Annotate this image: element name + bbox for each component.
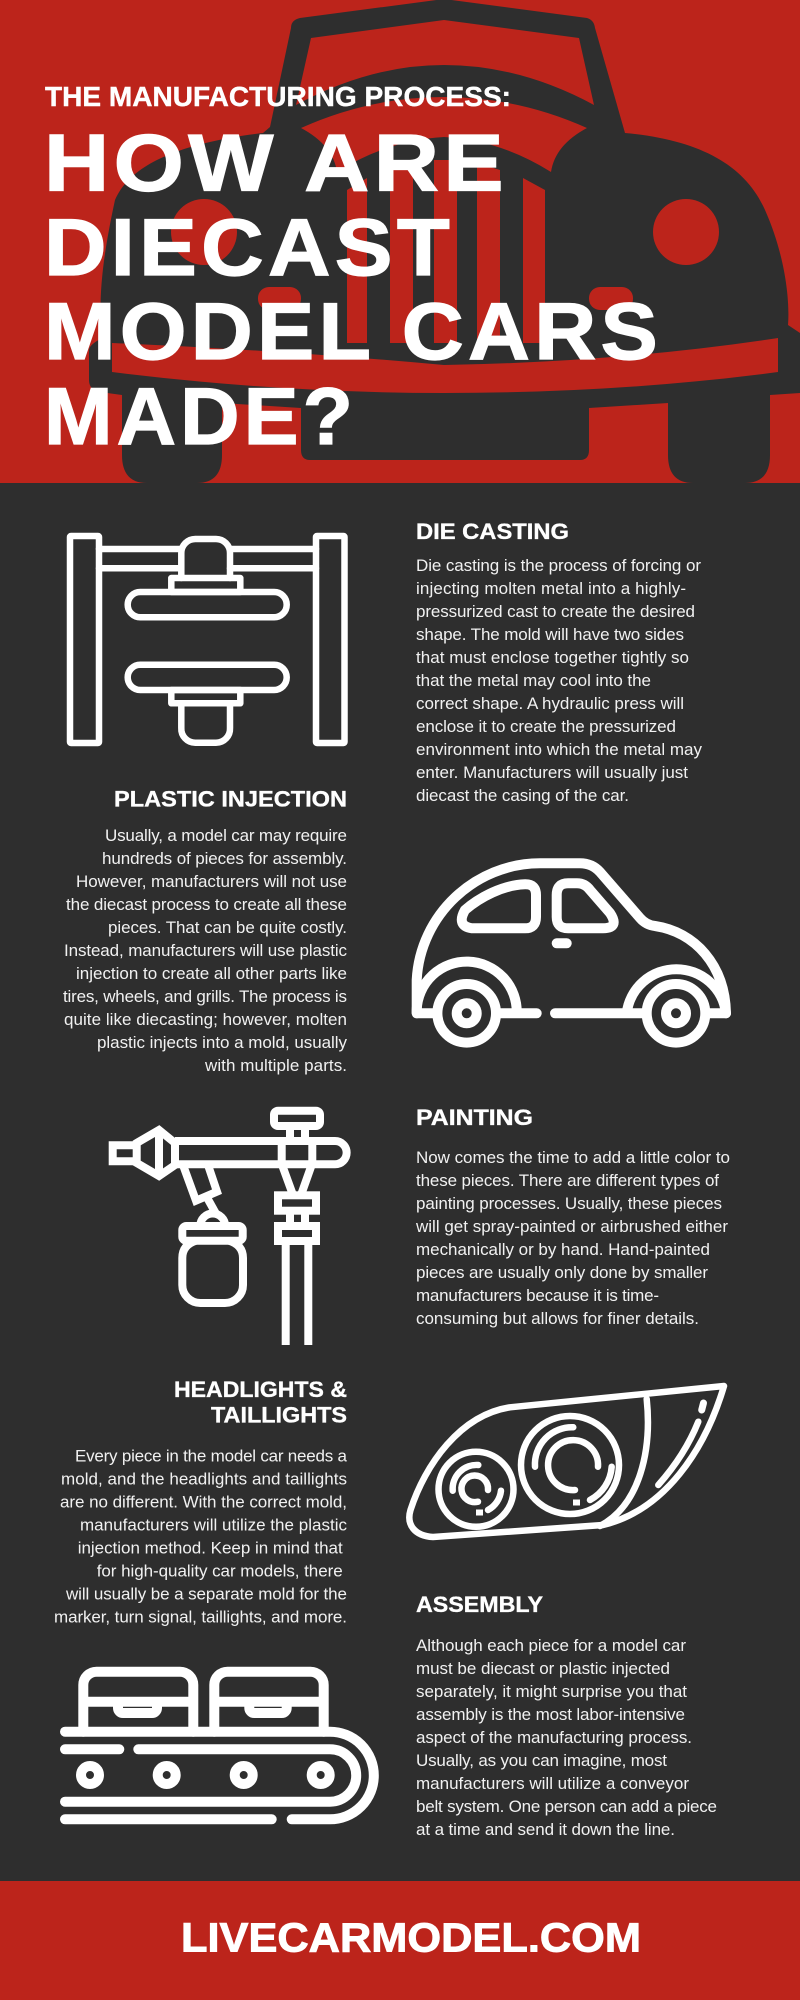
section: painting: mechanically or by hand. Hand-painted: [416, 1240, 710, 1259]
section: die casting: that the metal may cool into the: [416, 671, 651, 690]
section: die casting: correct shape. A hydraulic press will: [416, 694, 684, 713]
section: painting: Now comes the time to add a little color to: [416, 1148, 730, 1167]
icon: die casting press: [70, 536, 344, 743]
section: painting: painting processes. Usually, these pieces: [416, 1194, 722, 1213]
section: painting: these pieces. There are different types of: [416, 1171, 719, 1190]
section: plastic injection: quite like diecasting; however, molten: [64, 1010, 347, 1029]
icon: conveyor belt: [65, 1672, 374, 1819]
section: assembly: belt system. One person can add a piece: [416, 1797, 717, 1816]
section: headlights and taillights: are no different. With the correct mold,: [60, 1493, 347, 1512]
section: assembly: Although each piece for a model car: [416, 1636, 686, 1655]
section: assembly: [416, 1592, 717, 1839]
section: headlights and taillights: TAILLIGHTS: [211, 1403, 347, 1428]
section: plastic injection: Instead, manufacturers will use plastic: [64, 941, 348, 960]
main title: HOW ARE: [44, 119, 508, 209]
section: plastic injection: [63, 787, 348, 1075]
section: assembly: Usually, as you can imagine, most: [416, 1751, 667, 1770]
section: die casting: pressurized cast to create the desired: [416, 602, 695, 621]
section: painting: will get spray-painted or airbrushed either: [415, 1217, 728, 1236]
section: assembly: at a time and send it down the line.: [416, 1820, 675, 1839]
section: headlights and taillights: for high-quality car models, there: [97, 1562, 343, 1581]
section: painting: PAINTING: [416, 1105, 533, 1130]
hero car silhouette: [89, 0, 800, 483]
section: die casting: shape. The mold will have two sides: [416, 625, 684, 644]
section: assembly: ASSEMBLY: [416, 1592, 543, 1617]
section: headlights and taillights: marker, turn signal, taillights, and more.: [54, 1608, 347, 1627]
main title: MODEL CARS: [44, 287, 662, 377]
section: headlights and taillights: Every piece in the model car needs a: [75, 1447, 348, 1466]
icon: headlight: [409, 1386, 724, 1537]
section: painting: pieces are usually only done by smaller: [416, 1263, 708, 1282]
section: die casting: DIE CASTING: [416, 519, 569, 544]
icon: car: [417, 863, 726, 1043]
section: painting: manufacturers because it is time-: [416, 1286, 659, 1305]
main title: MADE?: [44, 372, 357, 462]
header banner: [0, 0, 800, 483]
section: headlights and taillights: injection method. Keep in mind that: [78, 1539, 343, 1558]
subtitle: THE MANUFACTURING PROCESS:: [45, 81, 511, 112]
section: die casting: enclose it to create the pressurized: [416, 717, 676, 736]
section: painting: [415, 1105, 730, 1328]
section: die casting: diecast the casing of the car.: [416, 786, 629, 805]
section: plastic injection: the diecast process to create all these: [66, 895, 347, 914]
section: plastic injection: with multiple parts.: [204, 1056, 347, 1075]
section: plastic injection: Usually, a model car may require: [105, 826, 347, 845]
main title: DIECAST: [44, 203, 454, 293]
main title: [44, 119, 662, 462]
footer band: [0, 1881, 800, 2000]
section: plastic injection: tires, wheels, and grills. The process is: [63, 987, 347, 1006]
section: assembly: manufacturers will utilize a conveyor: [416, 1774, 689, 1793]
section: die casting: Die casting is the process of forcing or: [416, 556, 701, 575]
section: painting: consuming but allows for finer details.: [416, 1309, 699, 1328]
section: headlights and taillights: will usually be a separate mold for the: [65, 1585, 347, 1604]
section: plastic injection: injection to create all other parts like: [76, 964, 347, 983]
section: die casting: environment into which the metal may: [416, 740, 702, 759]
section: plastic injection: plastic injects into a mold, usually: [97, 1033, 348, 1052]
section: assembly: aspect of the manufacturing process.: [416, 1728, 692, 1747]
section: die casting: that must enclose together tightly so: [416, 648, 689, 667]
section: headlights and taillights: [54, 1377, 348, 1627]
section: assembly: must be diecast or plastic injected: [416, 1659, 670, 1678]
section: die casting: injecting molten metal into a highly-: [416, 579, 686, 598]
section: die casting: [416, 519, 702, 805]
section: plastic injection: PLASTIC INJECTION: [114, 787, 347, 812]
section: assembly: assembly is the most labor-intensive: [416, 1705, 685, 1724]
section: die casting: enter. Manufacturers will usually just: [416, 763, 688, 782]
section: assembly: separately, it might surprise you that: [416, 1682, 687, 1701]
section: headlights and taillights: mold, and the headlights and taillights: [61, 1470, 347, 1489]
section: headlights and taillights: manufacturers will utilize the plastic: [80, 1516, 348, 1535]
footer website: LIVECARMODEL.COM: [181, 1915, 641, 1961]
section: plastic injection: pieces. That can be quite costly.: [108, 918, 347, 937]
section: headlights and taillights: HEADLIGHTS &: [174, 1377, 347, 1402]
icon: airbrush: [113, 1111, 347, 1345]
section: plastic injection: hundreds of pieces for assembly.: [102, 849, 347, 868]
section: plastic injection: However, manufacturers will not use: [76, 872, 347, 891]
